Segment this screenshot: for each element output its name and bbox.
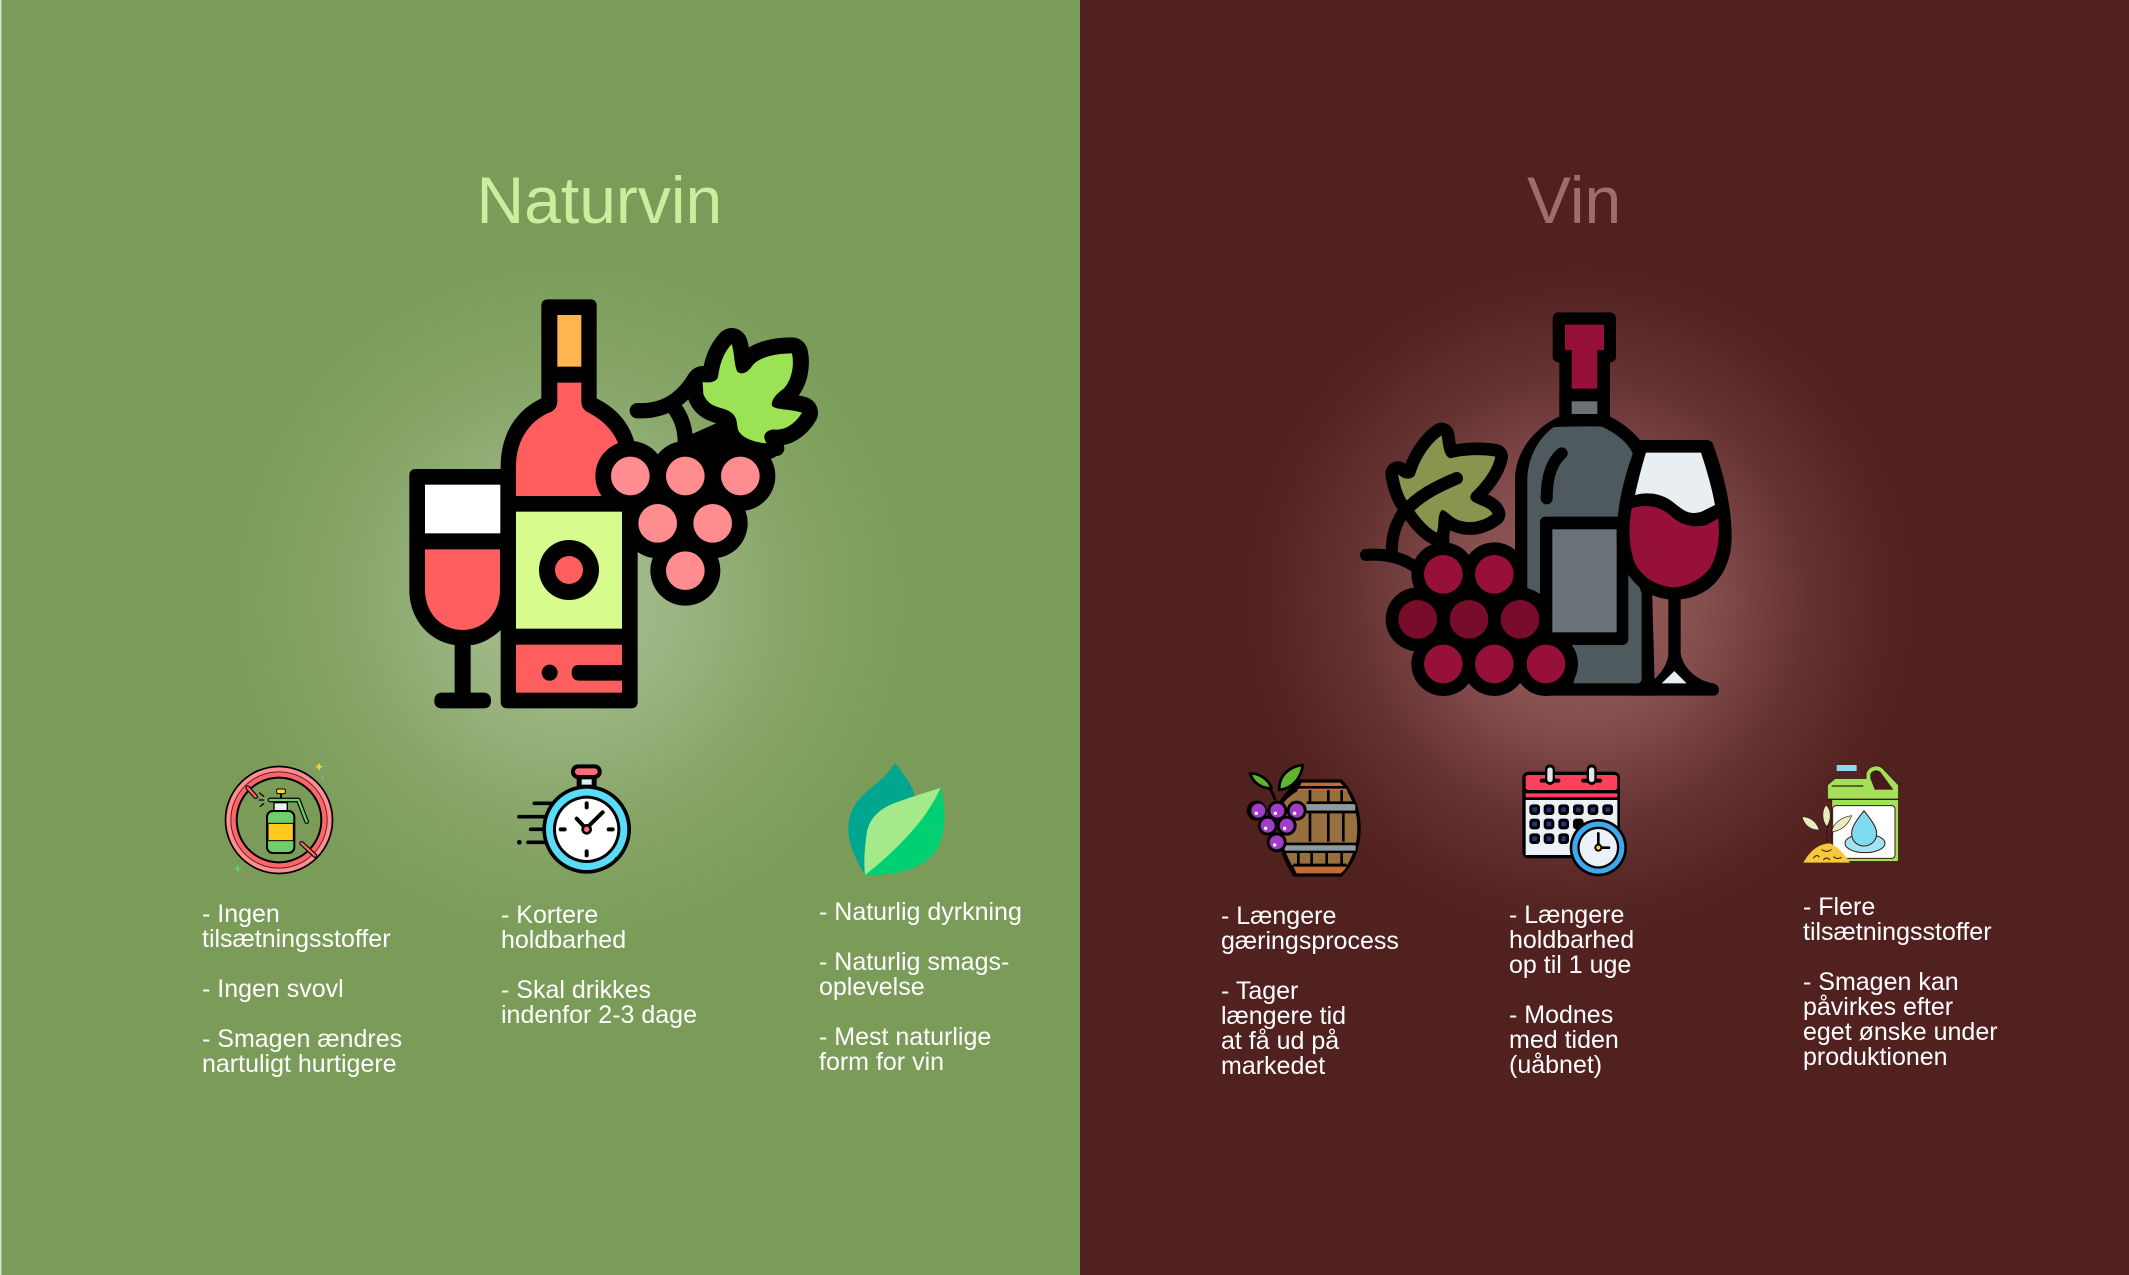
text: column 2: indenfor 2-3 dage bbox=[501, 1001, 697, 1029]
icon: green leaf bbox=[848, 763, 944, 875]
panel: Naturvin bbox=[0, 0, 1080, 1275]
text: column 1: - Smagen ændres bbox=[202, 1025, 402, 1053]
text: column 1: nartuligt hurtigere bbox=[202, 1050, 397, 1078]
text: column 3: - Flere bbox=[1803, 893, 1875, 921]
text: column 2: (uåbnet) bbox=[1509, 1051, 1602, 1079]
panel background: green bbox=[0, 0, 1080, 1275]
text: column 1: tilsætningsstoffer bbox=[202, 925, 391, 953]
text: column 3: tilsætningsstoffer bbox=[1803, 918, 1992, 946]
wine glass bbox=[1617, 440, 1732, 696]
text: column 2: med tiden bbox=[1509, 1026, 1619, 1054]
icon: additive canister with plant bbox=[1802, 765, 1899, 863]
text: column 2: - Længere bbox=[1509, 901, 1624, 929]
text: column 1: gæringsprocess bbox=[1221, 927, 1399, 955]
text: column 3: eget ønske under bbox=[1803, 1018, 1998, 1046]
text: column 2: - Kortere bbox=[501, 901, 598, 929]
icon: calendar with clock bbox=[1522, 764, 1627, 876]
leaf bbox=[1398, 435, 1495, 533]
stem and vine bbox=[637, 378, 777, 452]
text: column 1: - Ingen svovl bbox=[202, 975, 344, 1003]
grape cluster bbox=[595, 441, 775, 606]
icon: no pesticide spray bbox=[225, 763, 333, 877]
text: column 1: markedet bbox=[1221, 1052, 1325, 1080]
icon: fast stopwatch bbox=[517, 764, 631, 874]
grape cluster bbox=[1386, 542, 1578, 696]
text: column 1: at få ud på bbox=[1221, 1027, 1339, 1055]
text: column 2: holdbarhed bbox=[1509, 926, 1634, 954]
title: Naturvin: Naturvin bbox=[476, 163, 722, 237]
text: column 3: oplevelse bbox=[819, 973, 925, 1001]
text: column 2: holdbarhed bbox=[501, 926, 626, 954]
text: column 2: - Skal drikkes bbox=[501, 976, 651, 1004]
text: column 3: - Smagen kan bbox=[1803, 968, 1959, 996]
text: column 3: - Mest naturlige bbox=[819, 1023, 991, 1051]
text: column 1: længere tid bbox=[1221, 1002, 1346, 1030]
text: column 3: - Naturlig smags- bbox=[819, 948, 1009, 976]
radial glow behind the bottle bbox=[1230, 250, 1930, 950]
text: column 1: - Ingen bbox=[202, 900, 280, 928]
text: column 3: produktionen bbox=[1803, 1043, 1948, 1071]
vine bbox=[1366, 510, 1443, 567]
text: column 2: - Modnes bbox=[1509, 1001, 1613, 1029]
panel: Vin bbox=[1080, 0, 2129, 1275]
text: column 2: op til 1 uge bbox=[1509, 951, 1631, 979]
panel background: dark red bbox=[1080, 0, 2129, 1275]
text: column 3: form for vin bbox=[819, 1048, 944, 1076]
text: column 3: påvirkes efter bbox=[1803, 993, 1953, 1021]
leaf bbox=[703, 344, 802, 443]
icon: red wine bottle, glass and grapes bbox=[1366, 312, 1732, 696]
bottle bbox=[501, 299, 638, 708]
text: column 1: - Tager bbox=[1221, 977, 1298, 1005]
radial glow behind the bottle bbox=[200, 230, 940, 970]
icon: rosé bottle, glass and grapes bbox=[409, 299, 802, 708]
wine glass bbox=[409, 469, 507, 708]
bottle bbox=[1515, 312, 1655, 696]
icon: barrel with grapes bbox=[1247, 765, 1361, 877]
title: Vin: Vin bbox=[1527, 163, 1621, 237]
text: column 3: - Naturlig dyrkning bbox=[819, 898, 1022, 926]
text: column 1: - Længere bbox=[1221, 902, 1336, 930]
